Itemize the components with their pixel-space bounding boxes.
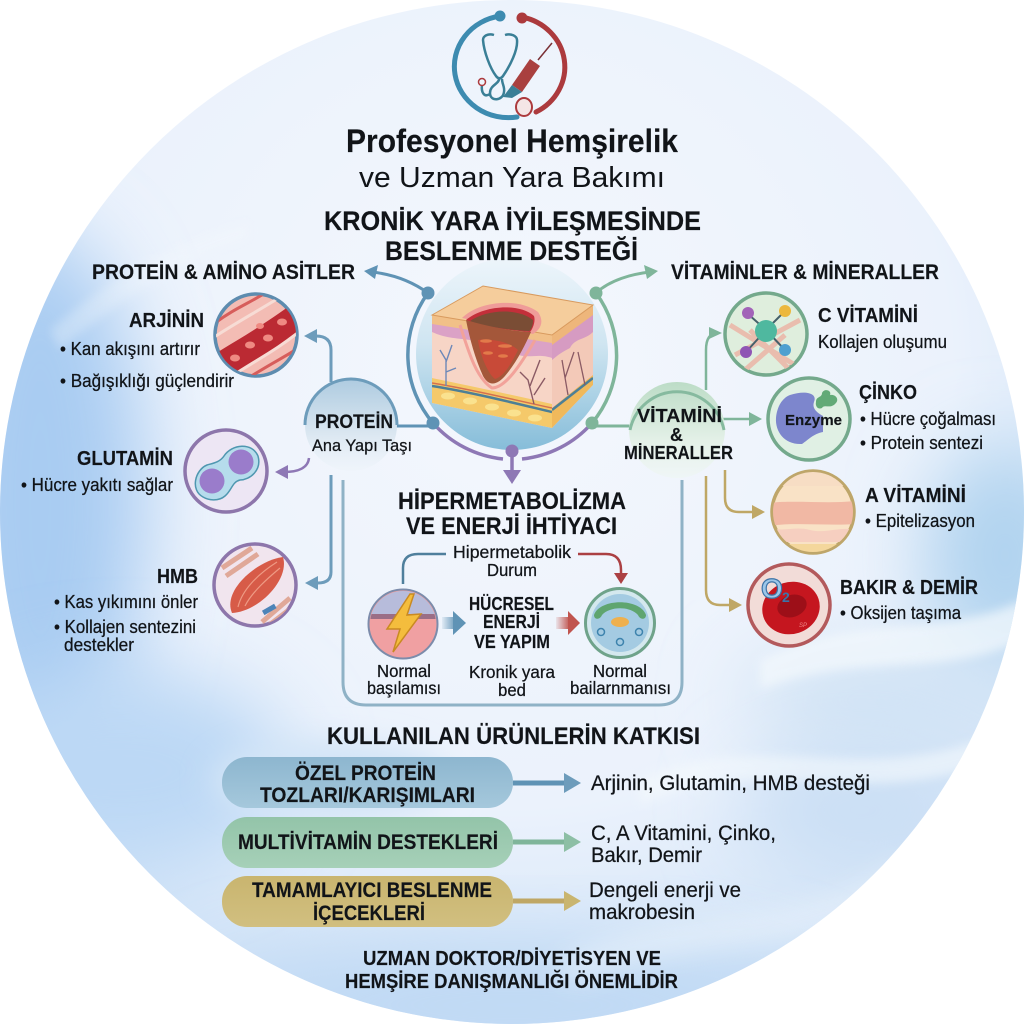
- panel: hypermetabolism: [343, 480, 682, 705]
- block: right face: [552, 306, 593, 428]
- node: protein: PROTEİN: [315, 412, 393, 433]
- item: bakir demir: [748, 564, 978, 646]
- item: hmb: • Kas yıkımını önler: [54, 592, 198, 612]
- arrow: red bracket: [578, 554, 628, 584]
- main heading: BESLENME DESTEĞİ: [385, 235, 638, 266]
- icon: skin layers: [770, 470, 856, 554]
- hub: wound illustration with ring: [408, 258, 617, 459]
- icon: blood vessel: [213, 292, 299, 378]
- item: hmb: destekler: [64, 635, 134, 655]
- arrow: vitamin to cinko: [722, 412, 762, 426]
- label: cellular energy: ENERJİ: [483, 612, 540, 632]
- label: hipermetabolik durum: Hipermetabolik: [453, 542, 571, 562]
- row: protein powders: [222, 757, 870, 808]
- title: ve Uzman Yara Bakımı: [359, 162, 665, 194]
- icon: cell: [586, 588, 654, 658]
- footer note: HEMŞİRE DANIŞMANLIĞI ÖNEMLİDİR: [345, 969, 679, 993]
- item: c vitamini: [725, 293, 947, 375]
- captions: Normal: [377, 661, 431, 681]
- icon: red blood cell: O: [761, 573, 783, 604]
- logo: [454, 10, 565, 118]
- item: arjinin: • Bağışıklığı güçlendirir: [60, 371, 234, 391]
- icon: molecule: [725, 293, 807, 375]
- arrow: hub to hypermetabolism: [503, 451, 521, 484]
- captions: bailarnmanısı: [570, 678, 671, 698]
- captions: bed: [498, 680, 526, 700]
- item: arjinin: ARJİNİN: [129, 309, 204, 332]
- item: a vitamini: • Epitelizasyon: [865, 511, 975, 531]
- main heading: KRONİK YARA İYİLEŞMESİNDE: [324, 206, 701, 236]
- heading: HİPERMETABOLİZMA: [398, 488, 626, 515]
- item: a vitamini: [770, 470, 975, 554]
- node: protein: [305, 379, 412, 471]
- arrow: vitamin to a vitamini: [725, 470, 765, 519]
- row: supplement drinks: TAMAMLAYICI BESLENME: [252, 879, 492, 902]
- connector: hub to protein node: [395, 424, 433, 428]
- icon: muscle: [214, 544, 296, 626]
- item: bakir demir: BAKIR & DEMİR: [840, 576, 978, 599]
- icon: red blood cell: 2: [782, 589, 790, 605]
- item: glutamin: GLUTAMİN: [77, 447, 173, 470]
- row: multivitamins: Bakır, Demir: [591, 844, 702, 867]
- label: cellular energy: HÜCRESEL: [469, 594, 554, 614]
- item: hmb: • Kollajen sentezini: [54, 617, 196, 637]
- row: supplement drinks: [222, 876, 741, 927]
- main heading: [324, 206, 701, 266]
- wound crater: [460, 303, 541, 388]
- row: supplement drinks: Dengeli enerji ve: [589, 879, 741, 902]
- title: [346, 123, 678, 194]
- item: glutamin: • Hücre yakıtı sağlar: [21, 475, 173, 495]
- arrow: hub to vitamins heading: [596, 265, 658, 293]
- item: glutamin: [21, 430, 267, 512]
- node: vitamins and minerals: &: [670, 425, 683, 445]
- captions: başılamısı: [367, 678, 441, 698]
- block: left face: [432, 316, 552, 428]
- icon: dividing cell: [185, 430, 267, 512]
- item: c vitamini: Kollajen oluşumu: [818, 332, 947, 352]
- item: cinko: • Protein sentezi: [860, 433, 983, 453]
- item: cinko: ÇİNKO: [859, 381, 917, 404]
- item: hmb: [54, 544, 296, 655]
- connector: left bracket: [403, 554, 446, 584]
- label: hipermetabolik durum: [453, 542, 571, 580]
- item: hmb: HMB: [157, 566, 198, 588]
- label: cellular energy: [469, 594, 554, 652]
- arrow: vitamin to bakir demir: [706, 476, 742, 612]
- row: protein powders: Arjinin, Glutamin, HMB desteği: [591, 772, 870, 795]
- row: multivitamins: C, A Vitamini, Çinko,: [591, 822, 776, 845]
- item: cinko: [768, 378, 996, 460]
- arrow: red: [556, 611, 580, 635]
- title: Profesyonel Hemşirelik: [346, 123, 678, 159]
- block: top face: [432, 286, 593, 335]
- icon: enzyme: [768, 378, 850, 460]
- row: protein powders: TOZLARI/KARIŞIMLARI: [260, 784, 475, 807]
- item: bakir demir: • Oksijen taşıma: [840, 603, 962, 623]
- footer note: UZMAN DOKTOR/DİYETİSYEN VE: [363, 947, 661, 970]
- node: protein: Ana Yapı Taşı: [312, 436, 412, 455]
- item: arjinin: • Kan akışını artırır: [60, 339, 200, 359]
- captions: Normal: [593, 661, 647, 681]
- heading: VE ENERJİ İHTİYACI: [406, 513, 617, 540]
- arrow: protein to hmb: [305, 475, 331, 590]
- row: multivitamins: [222, 817, 776, 868]
- row: protein powders: ÖZEL PROTEİN: [295, 762, 436, 785]
- icon: lightning: [365, 588, 441, 658]
- captions: Kronik yara: [469, 662, 555, 682]
- arrow: protein to glutamin: [275, 458, 309, 479]
- node: vitamins and minerals: [624, 382, 733, 478]
- row: multivitamins: MULTİVİTAMİN DESTEKLERİ: [238, 831, 498, 854]
- heading: [398, 488, 626, 540]
- node: vitamins and minerals: MİNERALLER: [624, 443, 733, 463]
- footer note: [345, 947, 679, 993]
- icon: red blood cell: SP: [799, 623, 807, 629]
- item: c vitamini: C VİTAMİNİ: [818, 304, 918, 327]
- connector: hub to vitamin node: [592, 424, 632, 428]
- arrow: protein to arjinin: [304, 329, 331, 382]
- icon: enzyme: Enzyme: [785, 412, 842, 429]
- item: cinko: • Hücre çoğalması: [860, 409, 996, 429]
- section heading: products: KULLANILAN ÜRÜNLERİN KATKISI: [327, 723, 700, 750]
- section heading: protein: PROTEİN & AMİNO ASİTLER: [92, 261, 355, 284]
- captions: [367, 661, 671, 700]
- arrow: vitamin to c vitamini: [706, 327, 722, 390]
- item: arjinin: [60, 288, 312, 391]
- icon: red blood cell: [748, 564, 830, 646]
- row: supplement drinks: İÇECEKLERİ: [313, 902, 425, 925]
- arrow: hub to protein heading: [364, 265, 428, 293]
- item: a vitamini: A VİTAMİNİ: [865, 484, 966, 507]
- node: vitamins and minerals: VİTAMİNİ: [637, 406, 722, 426]
- arrow: blue: [442, 611, 466, 635]
- row: supplement drinks: makrobesin: [589, 901, 695, 924]
- label: hipermetabolik durum: Durum: [487, 560, 537, 580]
- label: cellular energy: VE YAPIM: [474, 632, 550, 652]
- section heading: vitamins: VİTAMİNLER & MİNERALLER: [671, 261, 939, 284]
